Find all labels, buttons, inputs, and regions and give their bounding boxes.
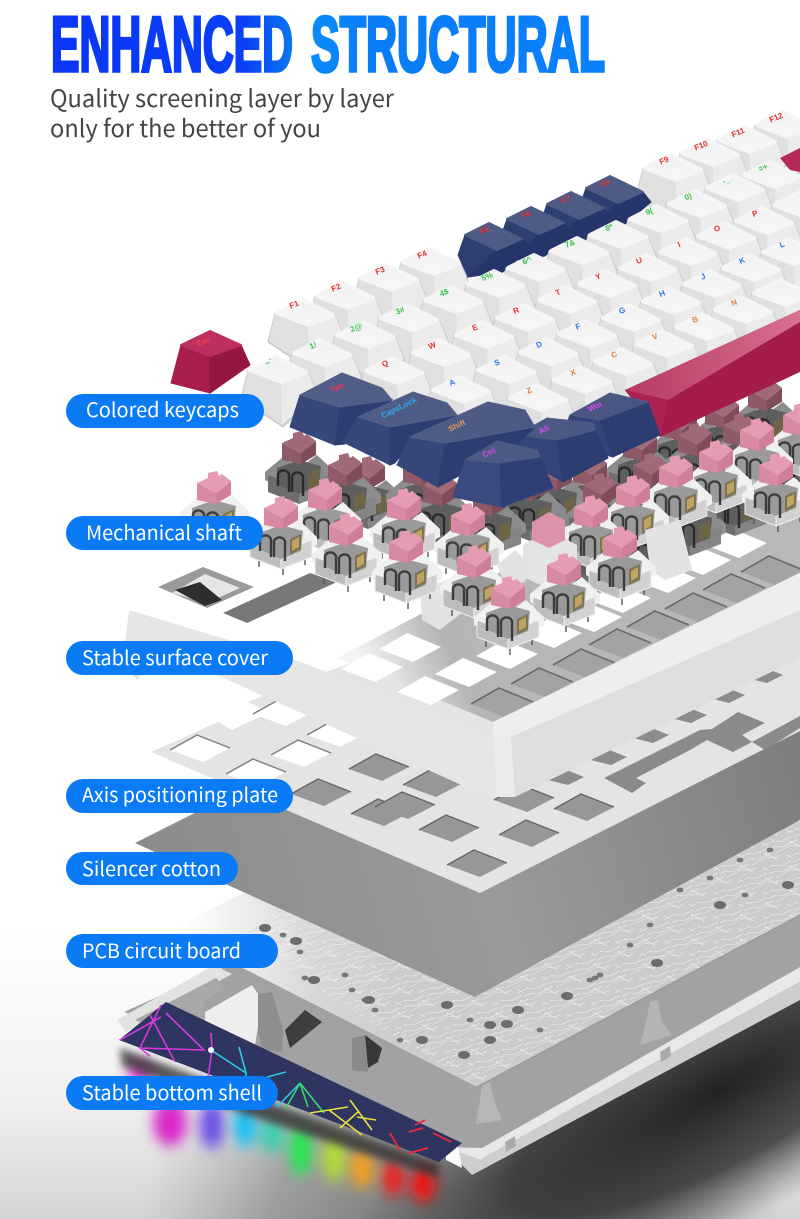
pink switches front row [312, 513, 656, 655]
number row [241, 162, 800, 427]
layer: silencer cotton [135, 560, 800, 997]
white stabilizer switch [523, 512, 577, 590]
cover grey holes [471, 556, 800, 717]
keycap legends: W [427, 340, 438, 351]
keycap legends: G [617, 305, 627, 316]
keycap legends: P [751, 208, 760, 219]
layer: PCB circuit board [168, 650, 800, 1087]
navy function keys [458, 176, 651, 277]
plate switch holes [291, 754, 614, 877]
keycap legends: ~` [264, 357, 274, 368]
keycap legends: 8* [604, 222, 615, 233]
keycap legends: F8 [599, 178, 612, 190]
keycap legends: B [691, 314, 700, 325]
keycap legends: O [712, 223, 722, 234]
keycap legends: F10 [693, 139, 710, 152]
pink switches back row [180, 403, 800, 582]
subtitle [50, 79, 395, 144]
keycap legends: F11 [730, 126, 746, 139]
layer: axis positioning plate [151, 500, 800, 893]
shadow below strip [120, 1048, 439, 1178]
keycap legends: F12 [768, 111, 785, 124]
layer: white keycaps [241, 111, 800, 455]
layer: stable bottom shell [117, 700, 800, 1202]
keycap legends: C [610, 349, 619, 360]
keycap legends: E [471, 322, 480, 333]
keycap legends: F3 [374, 265, 387, 277]
keycap legends: F6 [520, 209, 533, 221]
shell posts [258, 992, 672, 1124]
label: mechanical shaft [66, 516, 263, 550]
keycap legends: R [512, 305, 521, 316]
home row [424, 239, 800, 447]
navy modifier keys [290, 373, 660, 507]
label: colored keycaps [66, 394, 264, 428]
title: ENHANCED [51, 0, 293, 88]
keycap legends: F7 [560, 194, 573, 206]
keycap legends: T [554, 288, 562, 298]
keycap legends: 1! [308, 340, 318, 351]
keycap legends: U [635, 255, 644, 266]
plate slots [548, 667, 800, 793]
keycap legends: A [448, 377, 457, 388]
tab key: Tab [329, 381, 345, 395]
keycap legends: 5% [480, 270, 494, 283]
layer: stable surface cover [122, 400, 800, 797]
shift key: Shift [447, 418, 467, 434]
cover slot [223, 573, 337, 623]
keycap legends: K [738, 255, 747, 266]
keycap legends: 7& [564, 238, 577, 250]
keycap legends: J [699, 272, 707, 282]
esc keycap: Esc [195, 335, 212, 349]
keycap legends: S [493, 357, 502, 368]
shell floor [124, 700, 800, 1153]
label: pcb circuit board: PCB circuit board [82, 935, 241, 964]
cover rim [122, 573, 800, 797]
stabilizer housings [420, 520, 692, 630]
ctrl key [453, 441, 553, 507]
shift key [397, 402, 535, 487]
win key: Win [586, 400, 604, 414]
keycap legends: F2 [330, 282, 343, 294]
label: axis positioning plate: Axis positioning plate [82, 779, 278, 808]
cover grey interior [337, 470, 800, 722]
label: stable bottom shell: Stable bottom shell [82, 1077, 262, 1106]
keycap legends: 2@ [349, 321, 364, 334]
label: stable surface cover: Stable surface cover [82, 642, 268, 671]
keycap legends: 4$ [438, 287, 450, 299]
keycap legends: =+ [757, 162, 769, 174]
esc keycap [171, 331, 250, 393]
keycap legends: 6^ [521, 255, 533, 267]
keycap legends: V [651, 331, 660, 342]
keycap legends: Z [525, 386, 533, 396]
label: mechanical shaft: Mechanical shaft [86, 517, 242, 546]
cover corner cutout [158, 567, 254, 608]
rainbow reflection glow [129, 1061, 435, 1202]
keycap legends: Y [594, 271, 603, 282]
cover white holes [341, 529, 767, 705]
keycap legends: 9( [644, 206, 654, 217]
keycap legends [264, 111, 786, 396]
crimson space bar [625, 310, 800, 437]
label: stable surface cover [66, 641, 293, 675]
keycap legends: N [730, 297, 739, 308]
subtitle: only for the better of you [50, 109, 321, 144]
LED light strip [119, 1002, 462, 1162]
label: colored keycaps: Colored keycaps [86, 394, 239, 423]
keycap legends: X [569, 367, 578, 378]
caps lock key: CapsLock [380, 395, 419, 420]
caps lock key [343, 392, 457, 465]
bottom letter row [501, 280, 800, 455]
qwerty row [357, 192, 800, 428]
keycap legends: F5 [478, 225, 491, 237]
keycap legends: F4 [416, 249, 429, 261]
keycap legends: F [574, 322, 582, 332]
PCB holes [259, 848, 794, 1059]
keycap legends: I [676, 240, 682, 249]
keycap legends: 3# [394, 305, 406, 317]
alt key [510, 418, 608, 482]
tab key [290, 373, 392, 445]
keycap legends: 0) [683, 191, 693, 202]
ctrl key: Ctrl [481, 446, 497, 460]
alt key: Alt [537, 423, 551, 436]
keycap legends: H [658, 288, 667, 299]
shell front rim [444, 967, 800, 1175]
rear dark switches [265, 378, 800, 591]
keycap legends: F9 [658, 155, 671, 167]
label: pcb circuit board [66, 934, 278, 968]
function row [268, 112, 800, 370]
win key [560, 393, 660, 457]
keycap legends: D [535, 339, 544, 350]
layer: mechanical switches [180, 378, 800, 655]
plate white holes [170, 699, 367, 786]
backspace key [780, 148, 800, 172]
keycap legends: F1 [288, 299, 301, 311]
shell left wall [117, 965, 322, 1048]
keycap legends: L [778, 240, 786, 250]
label: silencer cotton: Silencer cotton [82, 853, 221, 882]
keycap legends: -_ [721, 175, 732, 186]
subtitle: Quality screening layer by layer [50, 79, 395, 114]
keycap legends: Q [380, 358, 390, 369]
